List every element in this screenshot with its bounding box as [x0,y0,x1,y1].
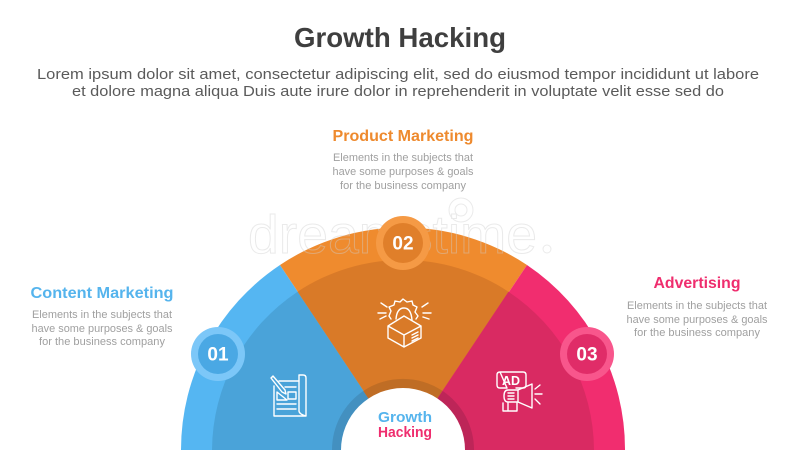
center circle: Hacking [378,424,432,441]
subtitle text: Lorem ipsum dolor sit amet, consectetur adipiscing elit, sed do eiusmod tempor incididunt ut labore [37,66,759,83]
text block: content marketing: Content Marketing [30,285,174,302]
badge: 01: 01 [207,344,229,366]
icon: ad megaphone [497,372,542,411]
icon: document with pen [271,375,306,416]
text block: advertising: Elements in the subjects that [627,300,767,312]
text block: product marketing: for the business company [340,180,466,192]
badge: 02: 02 [392,234,414,254]
text block: product marketing: Product Marketing [332,128,474,145]
segment: content marketing [181,265,403,450]
title: Growth Hacking [294,22,506,53]
center circle: Growth [378,409,432,426]
text block: advertising [626,275,768,339]
badge: 03: 03 [576,344,598,366]
subtitle text [37,66,759,100]
text block: content marketing: Elements in the subjects that [32,309,172,321]
subtitle text: et dolore magna aliqua Duis aute irure dolor in reprehenderit in voluptate velit esse sed do [72,83,724,100]
segment: product marketing [280,227,527,450]
icon: ad megaphone: AD [502,374,520,388]
text block: product marketing: Elements in the subjects that [333,152,473,164]
text block: advertising: for the business company [634,327,760,339]
text block: content marketing: have some purposes & goals [32,323,173,335]
segment: advertising [403,265,625,450]
text block: content marketing: for the business company [39,336,165,348]
text block: advertising: Advertising [654,275,740,292]
text block: content marketing [30,285,174,348]
center circle [341,388,465,450]
text block: product marketing [332,128,474,192]
badge: 01 [191,327,245,381]
text block: product marketing: have some purposes & goals [332,166,474,178]
badge: 02 [376,216,430,270]
semicircle chart [181,227,625,450]
icon: box with gear [378,299,431,347]
watermark: dreamstime [248,205,537,265]
text block: advertising: have some purposes & goals [626,314,768,326]
badge: 03 [560,327,614,381]
